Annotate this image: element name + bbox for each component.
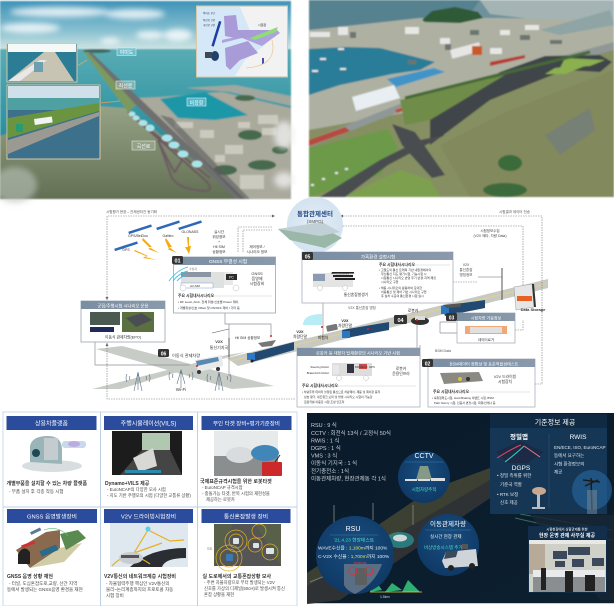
card: unmanned target and evaluation equipment: 무인 타겟 장비+평가기준장비 xyxy=(213,420,280,428)
panel 01: GNSS radio test: PC xyxy=(229,276,234,280)
card: commercial vehicle platform: 개별부품을 설치할 수 있는 차량 플랫폼 xyxy=(6,480,87,487)
site equipment list: 이동관제차량, 현장관제동 각 1식 xyxy=(311,474,386,482)
panel: reference information: 기준국 역할 xyxy=(500,481,522,488)
panel 05: congestion environment test: 통신혼잡발생기 xyxy=(344,292,368,297)
panel 05: congestion environment test: 무선통신 지도 평가시험, 기능시험 시 xyxy=(381,271,427,276)
panel 04: robot car scenario test: 상호 평가, 네트워크 모의 및 발생 시나리오 시험이 가능한 xyxy=(304,394,373,399)
panel 04: robot car scenario test: Steering Robot xyxy=(310,365,329,369)
roads and links xyxy=(92,214,548,399)
icon: V2X roadside base station xyxy=(210,329,229,357)
panel 04: robot car scenario test: • 차량주행 데이터 설정된 통신으로 차량제어, 제동 및 제어장 동작 xyxy=(302,389,381,394)
panel 01: GNSS radio test: 음영제 xyxy=(251,275,263,281)
label: test vehicle 04: 04 xyxy=(397,318,404,324)
circle: mobile control vehicle: 실시간 현장 관제 xyxy=(430,533,461,540)
panel: aerial rendering of test site xyxy=(0,1,294,203)
panel 02: BSM data accuracy and standard test: 시험장치 xyxy=(498,379,512,384)
card: unmanned target and evaluation equipment: 국제표준규격시험을 위한 로봇타겟 xyxy=(200,478,272,485)
control center globe: (SMPG) xyxy=(307,219,324,224)
label: V2X signal info: V2X xyxy=(463,263,470,267)
circle: RSU xyxy=(316,516,394,594)
panel 02: BSM data accuracy and standard test: V2V 드라이빙 xyxy=(494,374,517,379)
panel: mobile operation scenario: 군집/주행시험 시나리오 운용 xyxy=(97,302,149,310)
card: GNSS shadow generator: 등에서 발생되는 GNSS음영 환경을 재현 xyxy=(7,586,83,593)
card: commercial vehicle platform: - 부품 설치 후 각종 작동 시험 xyxy=(9,488,64,495)
satellites and signals: Galileo xyxy=(163,234,173,238)
card: communication congestion generator: 혼잡 상황을 재현 xyxy=(204,591,234,598)
icon: semi-truck with drone xyxy=(247,340,294,362)
panel: aerial photo of completed road and harbor xyxy=(309,0,614,197)
icon: comm pole xyxy=(478,268,502,300)
label: 비응항: 비응항 xyxy=(190,100,204,106)
label: test vehicle collected data: (V2X 메타, 차량 Data) xyxy=(473,233,507,238)
card: V2V driving test equipment: V2V통신의 네트워크계층 시험장비 xyxy=(104,573,176,580)
labels: V2X vehicle labels: 차량단말 xyxy=(338,323,352,328)
panel 05: congestion environment test: 주요 시험내사시나리오 xyxy=(379,262,415,267)
card: V2V driving test equipment: 시험 장비 xyxy=(106,592,124,599)
icon: V2X roadside base station: V2X xyxy=(215,339,223,344)
label 06: mobile control vehicle: 06 xyxy=(161,352,166,358)
circle: RSU: WAVE수신율 : 1,100m까지 100% xyxy=(318,544,388,552)
circle: mobile control vehicle xyxy=(417,514,479,576)
inset: site location map xyxy=(196,6,288,77)
panel 02: BSM data accuracy and standard test: 주요 시험내사시나리오 xyxy=(433,389,469,394)
site equipment list: RWIS : 1 식 xyxy=(311,436,340,444)
panel 05: congestion environment test: 시나리오 구현 xyxy=(381,279,399,284)
inset: site location map: 시험장 xyxy=(258,22,267,27)
card: GNSS shadow generator: - 터널, 도심혼잡도로,교량, 산간 지역 xyxy=(9,580,77,587)
label: 직선로 xyxy=(116,81,135,90)
wifi towers xyxy=(126,370,231,392)
site equipment list: VMS : 3 식 xyxy=(311,452,337,460)
satellites and signals: GLONASS xyxy=(182,230,199,234)
label: control information: 시나리오 정보 xyxy=(247,249,268,254)
card: communication congestion generator: 통신혼잡발생 장비 xyxy=(224,512,268,520)
label: 야미도 xyxy=(117,48,136,56)
panel: reference information: • RTK 보정 xyxy=(497,491,518,497)
panel: reference information xyxy=(490,414,612,514)
panel 04: robot car scenario test: GPS xyxy=(369,365,375,369)
label: 비응항 xyxy=(187,98,206,106)
panel 04: robot car scenario test: 로봇카를 이용한 시험 조성 인프라 xyxy=(304,399,345,404)
panel: on-site control room xyxy=(528,526,607,593)
circle: CCTV: CCTV xyxy=(414,453,434,460)
panel 03: test vehicle driving info: 시험차량 거동정보 xyxy=(471,314,502,320)
icon: mobile control truck xyxy=(195,355,223,374)
card: VILS driving simulation: Dynamo+VILS 제공 xyxy=(105,480,150,487)
panel: reference information: 정밀맵 xyxy=(510,432,528,441)
panel 04: robot car scenario test: 로봇카 등 대항차 탑재환경의 시나리오 기반 시험 xyxy=(316,350,400,356)
control center globe: 통합관제센터 xyxy=(297,209,333,218)
panel 02: BSM data accuracy and standard test xyxy=(422,359,535,407)
card: commercial vehicle platform xyxy=(6,416,96,495)
panel 05: congestion environment test: • 고밀도의 통신 트래픽 기반 내환경에서의 xyxy=(379,267,431,272)
label: Hil SIM data: Hil SIM 상황정보 xyxy=(235,335,261,340)
label: V2X signal info xyxy=(460,263,473,277)
labels: V2X vehicle labels: V2X xyxy=(341,319,349,323)
panel 05: congestion environment test xyxy=(302,252,453,303)
labels: V2X vehicle labels: 피험차 xyxy=(318,335,329,340)
label: 곡선로: 곡선로 xyxy=(137,143,151,150)
site equipment list: CCTV : 회전식 13식 / 고정식 50식 xyxy=(311,429,391,437)
label: V2X signal info: 통신혼잡 xyxy=(460,267,473,272)
panel 04: robot car scenario test xyxy=(297,348,420,407)
inset: causeway photo xyxy=(7,44,87,82)
card: unmanned target and evaluation equipment xyxy=(200,416,292,503)
panel 01: GNSS radio test: 시험장비 xyxy=(250,280,265,286)
card: V2V driving test equipment: 물리~논리계층까지의 프로토콜 자동 xyxy=(106,586,173,593)
diagram: test system architecture xyxy=(81,197,548,407)
panel: on-site control room: 시험현장에서 상황관제를 위한 xyxy=(546,526,588,532)
card: unmanned target and evaluation equipment: - EuroNCAP 규격시험 xyxy=(202,484,243,491)
circle: RSU: '21.4.23 현장테스트 xyxy=(334,536,375,544)
panel 04: robot car scenario test: 주요 시험내사시나리오 xyxy=(302,383,338,388)
panel 01: GNSS radio test xyxy=(169,256,276,313)
card: GNSS shadow generator: GNSS 음영발생장비 xyxy=(27,512,77,520)
panel 01: GNSS radio test: • RF Level, AGC, 전체 위성/신호별 Power 제어, xyxy=(178,299,239,304)
panel 02: BSM data accuracy and standard test: 02 xyxy=(425,362,430,368)
icon: data storage: Data Storage xyxy=(521,307,546,312)
label: control information xyxy=(247,244,268,254)
label: Hil SIM data xyxy=(235,335,272,340)
icon: V2X roadside base station: 통신기지국 xyxy=(210,344,229,350)
site equipment list: RSU : 9 식 xyxy=(311,421,337,429)
site equipment list: 이동식 기지국 : 1 식 xyxy=(311,459,357,467)
panel 01: GNSS radio test: 주요 시험내사시나리오 xyxy=(178,293,214,298)
panel 04: robot car scenario test: DRIVE-IO xyxy=(355,365,368,369)
card: V2V driving test equipment: - 자율협력주행 핵심인 V2V통신의 xyxy=(106,580,169,587)
icon: data storage xyxy=(514,284,546,312)
inset: site location map: 야미도 부근 xyxy=(203,11,216,15)
panel: reference information: • 정밀 측위를 위한 xyxy=(497,472,531,479)
panel 01: GNSS radio test: GNSS 무결성 시험 xyxy=(209,258,247,265)
panel: reference information: 등에서 요구하는 xyxy=(554,452,584,459)
label: V2X congestion signal: V2X 통신혼잡 명칭 xyxy=(348,305,376,310)
card: unmanned target and evaluation equipment: 제공하는 로봇카 xyxy=(206,496,235,503)
panel: reference information: 시험 환경정보의 xyxy=(554,460,584,468)
label 06: mobile control vehicle xyxy=(158,349,200,359)
card: VILS driving simulation: 주행시뮬레이션(VILS) xyxy=(121,420,176,428)
card: communication congestion generator: 신호를 가상의 디제널(50cH)로 발생시켜 통신 xyxy=(204,585,285,592)
inset: site location map: 직선로 구간 xyxy=(203,18,216,22)
panel 02: BSM data accuracy and standard test: • 측위정확도시험, Hard Braking 이벤트 시험, BSM xyxy=(432,395,494,400)
label: V2X signal info: 명칭정보 xyxy=(460,272,473,277)
circle: RSU: Antenna xyxy=(353,561,367,565)
panel 01: GNSS radio test: • 개별위성/신호 Offset 및 ON/OFF 제어 / 기타 등 xyxy=(178,305,240,310)
card: commercial vehicle platform: 상용차플랫폼 xyxy=(35,420,69,428)
labels: V2X vehicle labels: V2X xyxy=(296,330,304,334)
card: V2V driving test equipment: V2V 드라이빙시험장비 xyxy=(121,512,176,520)
panel 04: robot car scenario test: 로봇카 xyxy=(396,366,407,371)
inset: road side photo with truck xyxy=(7,85,120,159)
label: 야미도: 야미도 xyxy=(120,49,134,56)
panel 05: congestion environment test: 이동통신 및 제어 기반 시나리오 구현 xyxy=(381,289,427,294)
circle: RSU: C-V2X 수신율 : 1,700m까지 100% xyxy=(318,553,390,560)
label: data transmission note: 시험결과 데이터 전송 xyxy=(499,209,531,214)
control center globe xyxy=(278,197,343,253)
label: BSM data: BSM Data xyxy=(435,349,451,353)
site equipment list: 전기충전소 : 1식 xyxy=(311,467,349,475)
card: communication congestion generator xyxy=(202,509,290,598)
panel 05: congestion environment test: 가혹환경 설정시험 xyxy=(361,254,395,260)
panel: reference information: 기준정보 제공 xyxy=(535,418,576,426)
label: position and SIM data: 실시간 xyxy=(214,229,225,234)
panel 03: test vehicle driving info xyxy=(446,313,515,343)
card: VILS driving simulation: - EuroNCAP의 다양한 모사 시험 xyxy=(107,486,166,493)
circle: mobile control vehicle: 비상방송시스템 추가 xyxy=(424,544,463,551)
panel: reference information: DGPS xyxy=(512,465,531,472)
panel 03: test vehicle driving info: 데이터로거 xyxy=(478,337,494,342)
panel 01: GNSS radio test: 수신기 xyxy=(189,267,197,271)
label: position and SIM data: + xyxy=(218,240,220,244)
card: V2V driving test equipment xyxy=(104,509,193,599)
panel 01: GNSS radio test: GNSS xyxy=(251,271,263,276)
panel: reference information: EN/ECE, ISO, EuroNCAP xyxy=(554,445,606,450)
panel: reference information: 제공 xyxy=(554,468,562,476)
label: test vehicle collected data: 시험정보수집 xyxy=(480,228,500,233)
panel 05: congestion environment test: 05 xyxy=(305,254,310,260)
label: timing sync note: 시험평가 현장 – 관제센터간 동기화 xyxy=(106,209,158,214)
card: communication congestion generator: SS xyxy=(207,546,213,551)
panel 05: congestion environment test: 시험통신 시나리오 반영 주기·반경·지역 패킷 xyxy=(381,275,436,280)
panel: equipment card grid xyxy=(3,412,297,606)
site equipment list xyxy=(311,421,391,482)
panel: night test-site overview xyxy=(307,413,614,604)
card: VILS driving simulation: - 지도 기반 주행모의 시험 (다양한 교통류 상황) xyxy=(107,492,191,499)
panel 05: congestion environment test: • 해동 시나리오의 활용하여 모의한 xyxy=(379,285,422,290)
circle: RSU: RSU xyxy=(346,526,360,533)
inset: site location map: 곡선로 구간 xyxy=(203,23,216,27)
circle: CCTV: 시험차량추적 xyxy=(412,486,436,493)
card: VILS driving simulation xyxy=(104,416,193,499)
panel 03: test vehicle driving info: 03 xyxy=(449,316,454,322)
wifi towers: Wi-Fi xyxy=(176,387,186,392)
label: position and SIM data: 위성정보 xyxy=(212,234,226,239)
label: 곡선로 xyxy=(132,141,155,150)
card: unmanned target and evaluation equipment: - 충돌가능 타겟, 반복 시험의 재현성을 xyxy=(202,490,270,497)
labels: V2X vehicle labels: 로봇카 xyxy=(408,308,419,313)
label: 직선로: 직선로 xyxy=(119,82,133,90)
panel 01: GNSS radio test: Hil-SIM xyxy=(190,284,200,288)
label 06: mobile control vehicle: 이동식 관제차량 xyxy=(172,352,200,359)
panel: night test-site overview: 1.5km xyxy=(380,595,390,599)
label: position and SIM data: HiI SIM xyxy=(213,245,225,249)
panel: reference information: 신호 제공 xyxy=(500,499,518,506)
card: GNSS shadow generator xyxy=(7,509,97,593)
card: communication congestion generator: - 주변 자율자량으로 부터 발생되는 V2V xyxy=(204,579,275,586)
label: control information: 제어정보 / xyxy=(249,244,265,249)
panel 01: GNSS radio test: 01 xyxy=(174,258,181,264)
card: communication congestion generator: 실 도로에서의 교통혼잡상황 모사 xyxy=(202,573,271,580)
panel 04: robot car scenario test: 운용인프라 xyxy=(392,371,410,376)
satellites and signals xyxy=(114,220,202,260)
panel: reference information: RWIS xyxy=(570,434,587,441)
panel 02: BSM data accuracy and standard test: BSM데이터 정확성 및 표준적합성테스트 xyxy=(450,360,519,366)
circle: mobile control vehicle: 이동관제차량 xyxy=(430,519,466,528)
panel: mobile operation scenario xyxy=(81,301,165,342)
panel 02: BSM data accuracy and standard test: Path history 시험, 인증서 변경시험, 파워/안테나 등 xyxy=(434,400,496,405)
label: position and SIM data: 상황정보 xyxy=(212,249,226,254)
icon: V2X test vehicles on road xyxy=(303,300,485,338)
labels: V2X vehicle labels xyxy=(293,308,419,340)
card: GNSS shadow generator: GNSS 음영 상황 재현 xyxy=(7,573,53,580)
label: position and SIM data xyxy=(212,229,226,254)
panel 05: congestion environment test: 후 실차 수준의 통신환경 시험 실시 xyxy=(381,293,424,298)
label: test vehicle collected data xyxy=(473,228,507,238)
site equipment list: DGPS : 1 식 xyxy=(311,444,341,452)
circle: CCTV xyxy=(398,451,450,503)
panel: mobile operation scenario: 이동식 관제차량(EPO) xyxy=(105,334,142,340)
satellites and signals: GPS/BeiDou xyxy=(128,234,148,238)
panel: on-site control room: 현장 운영 관제 사무실 제공 xyxy=(539,532,595,539)
satellites and signals: GPS xyxy=(122,248,130,252)
panel 04: robot car scenario test: Brake/ACC Robot xyxy=(307,371,329,375)
label: test vehicle 04 xyxy=(394,315,407,324)
labels: V2X vehicle labels: 차량단말 xyxy=(293,334,307,339)
panel 05: congestion environment test: V2X통신혼잡제어 xyxy=(331,271,349,275)
